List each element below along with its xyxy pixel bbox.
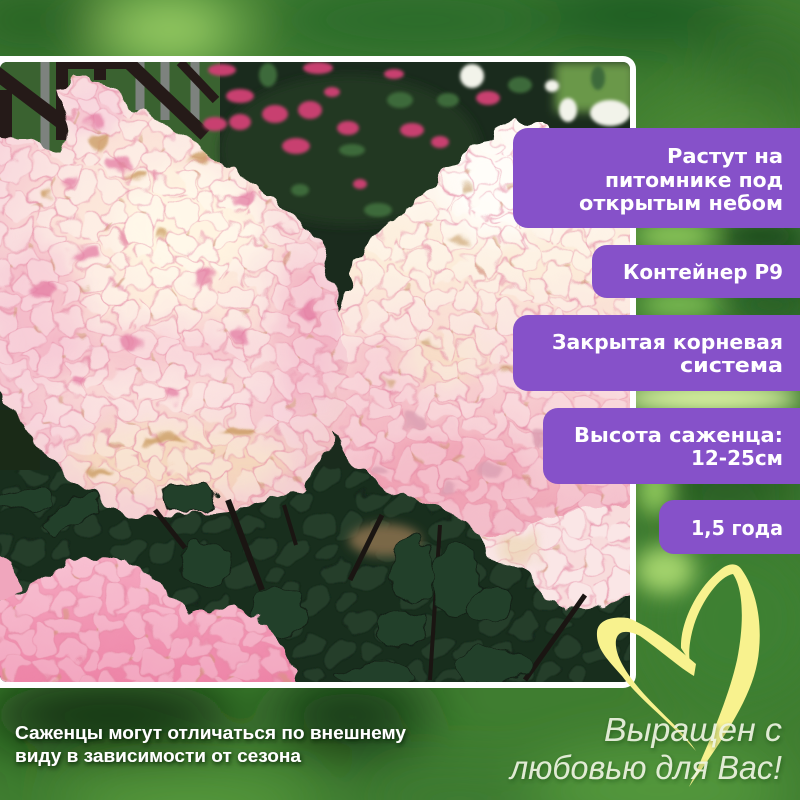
right panicle [332, 118, 630, 538]
slogan [508, 711, 782, 786]
info badge: container [592, 245, 800, 298]
info badge: seedling height: Высота саженца: [574, 423, 783, 447]
fence [0, 62, 216, 150]
info badge: grown outdoors: Растут на [667, 144, 783, 168]
photo of hydrangea [0, 60, 660, 715]
dark stems [155, 500, 585, 680]
icon: hand-drawn yellow heart [597, 564, 760, 787]
slogan: любовью для Вас! [508, 749, 782, 786]
info badge: root system: Закрытая корневая [552, 330, 783, 354]
info badge: grown outdoors [513, 128, 800, 228]
info badge: grown outdoors: питомнике под [605, 168, 783, 192]
green leaves and white blooms behind [259, 63, 630, 217]
garden backdrop [0, 62, 635, 682]
disclaimer note: Саженцы могут отличаться по внешнему [15, 722, 407, 743]
disclaimer note: виду в зависимости от сезона [15, 745, 302, 766]
bottom-left pink panicle [0, 556, 298, 682]
left panicle [0, 60, 360, 530]
info badge: seedling height: 12-25см [691, 446, 783, 470]
info badge: root system: система [680, 353, 783, 377]
info badge: grown outdoors: открытым небом [579, 191, 783, 215]
info badge: age [659, 500, 800, 554]
info badge: age: 1,5 года [691, 516, 783, 540]
info badge: container: Контейнер Р9 [623, 260, 783, 284]
disclaimer note [15, 722, 407, 766]
info badge: root system [513, 315, 800, 391]
lower right panicle [479, 504, 630, 610]
slogan: Выращен с [604, 711, 782, 748]
big green leaves [0, 484, 530, 687]
pink bee balm flowers [203, 62, 500, 189]
white photo frame [0, 56, 636, 688]
info badge: seedling height [543, 408, 800, 484]
